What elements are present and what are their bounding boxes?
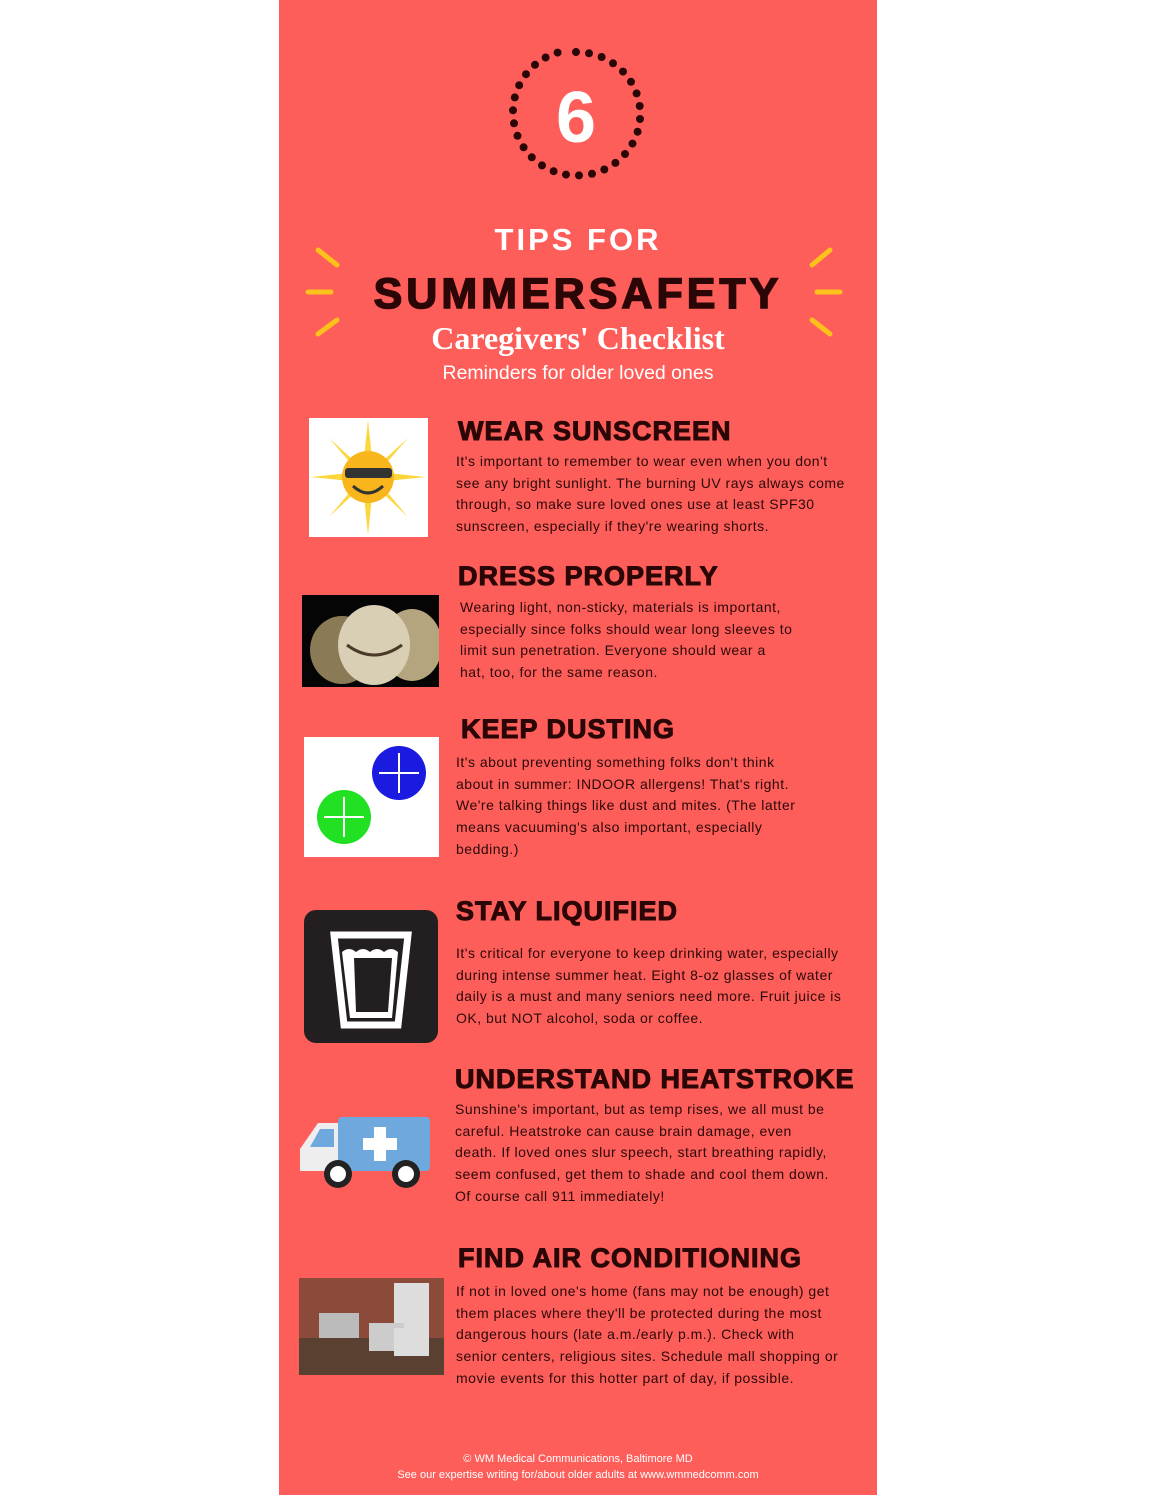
- title: tips for: TIPS FOR: [495, 222, 661, 257]
- icon: hats photo: [302, 595, 439, 687]
- subtitle: caregivers checklist: Caregivers' Checklist: [431, 320, 725, 356]
- icon: sun with sunglasses: [309, 418, 428, 537]
- heading: keep dusting: KEEP DUSTING: [461, 714, 675, 744]
- icon: sun rays right: [810, 248, 842, 336]
- text: sunscreen: through, so make sure loved ones use at least SPF30: [456, 496, 815, 512]
- text: liquified: It's critical for everyone to keep drinking water, especially: [456, 945, 839, 961]
- text: dress: limit sun penetration. Everyone should wear a: [460, 642, 766, 658]
- heading: wear sunscreen: WEAR SUNSCREEN: [458, 416, 732, 446]
- icon: dust particles: [304, 737, 439, 857]
- text: air conditioning: movie events for this hotter part of day, if possible.: [456, 1370, 794, 1386]
- text: liquified: [456, 945, 841, 1026]
- icon: sun rays left: [306, 248, 340, 336]
- panel: background: [279, 0, 877, 1495]
- text: air conditioning: senior centers, religious sites. Schedule mall shopping or: [456, 1348, 838, 1364]
- icon: air conditioner units photo: [299, 1278, 444, 1375]
- text: dusting: [456, 754, 795, 857]
- text: dress: [460, 599, 792, 680]
- icon: water glass: [304, 910, 438, 1043]
- text: heatstroke: Sunshine's important, but as temp rises, we all must be: [455, 1101, 824, 1117]
- text: dusting: bedding.): [456, 841, 519, 857]
- text: dusting: It's about preventing something folks don't think: [456, 754, 775, 770]
- text: liquified: daily is a must and many seniors need more. Fruit juice is: [456, 988, 841, 1004]
- text: heatstroke: death. If loved ones slur speech, start breathing rapidly,: [455, 1144, 827, 1160]
- heading: dress properly: DRESS PROPERLY: [458, 561, 719, 591]
- text: dusting: means vacuuming's also important, especially: [456, 819, 762, 835]
- text: liquified: OK, but NOT alcohol, soda or coffee.: [456, 1010, 703, 1026]
- text: heatstroke: careful. Heatstroke can cause brain damage, even: [455, 1123, 792, 1139]
- text: dress: hat, too, for the same reason.: [460, 664, 658, 680]
- text: sunscreen: It's important to remember to wear even when you don't: [456, 453, 828, 469]
- badge: number 6 in dotted circle: [509, 48, 644, 180]
- heading: stay liquified: STAY LIQUIFIED: [456, 896, 678, 926]
- text: air conditioning: If not in loved one's home (fans may not be enough) get: [456, 1283, 829, 1299]
- footer: [397, 1453, 759, 1481]
- text: dress: especially since folks should wear long sleeves to: [460, 621, 792, 637]
- heading: understand heatstroke: UNDERSTAND HEATSTROKE: [455, 1064, 855, 1094]
- text: sunscreen: see any bright sunlight. The burning UV rays always come: [456, 475, 845, 491]
- text: heatstroke: seem confused, get them to shade and cool them down.: [455, 1166, 829, 1182]
- text: air conditioning: them places where they'll be protected during the most: [456, 1305, 822, 1321]
- heading: find air conditioning: FIND AIR CONDITIONING: [458, 1243, 802, 1273]
- footer: See our expertise writing for/about older adults at www.wmmedcomm.com: [397, 1469, 759, 1481]
- text: liquified: during intense summer heat. Eight 8-oz glasses of water: [456, 967, 833, 983]
- badge: number 6 in dotted circle: 6: [556, 78, 596, 158]
- text: dusting: We're talking things like dust and mites. (The latter: [456, 797, 795, 813]
- text: dusting: about in summer: INDOOR allergens! That's right.: [456, 776, 789, 792]
- title: summer safety: SUMMERSAFETY: [374, 270, 782, 318]
- text: sunscreen: [456, 453, 845, 534]
- subtitle: reminders: Reminders for older loved ones: [442, 362, 713, 384]
- text: heatstroke: [455, 1101, 829, 1204]
- footer: © WM Medical Communications, Baltimore MD: [463, 1453, 693, 1465]
- text: air conditioning: dangerous hours (late a.m./early p.m.). Check with: [456, 1326, 795, 1342]
- icon: ambulance: [300, 1117, 430, 1188]
- text: dress: Wearing light, non-sticky, materials is important,: [460, 599, 781, 615]
- text: air conditioning: [456, 1283, 838, 1386]
- text: heatstroke: Of course call 911 immediately!: [455, 1188, 665, 1204]
- text: sunscreen: sunscreen, especially if they're wearing shorts.: [456, 518, 769, 534]
